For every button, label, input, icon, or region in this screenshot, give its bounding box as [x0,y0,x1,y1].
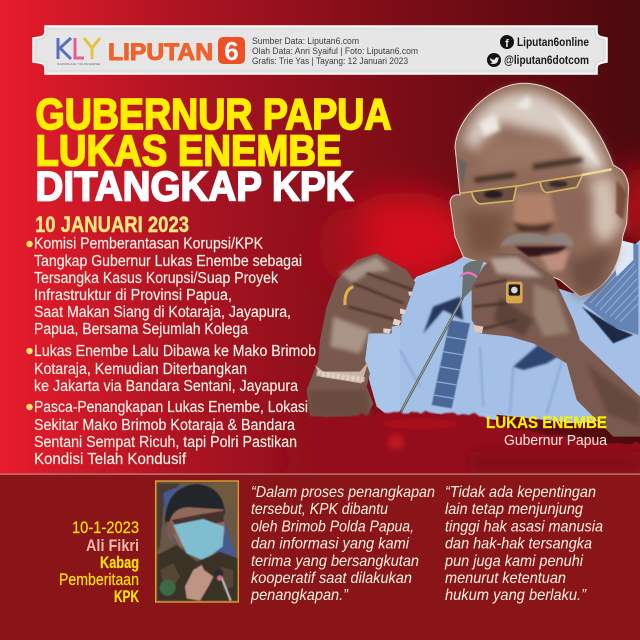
quote 1: oleh Brimob Polda Papua, [251,518,414,536]
quote 1: “Dalam proses penangkapan [251,484,435,501]
ragged red fade below portrait [270,412,640,480]
quote 2: lain tetap menjunjung [445,501,583,518]
Liputan6 logo: LIPUTAN [108,39,213,66]
bullet 2: Kotaraja, Kemudian Diterbangkan [34,361,247,378]
portrait name label: Gubernur Papua [504,432,608,449]
social: facebook [500,35,589,50]
microphone [400,261,483,413]
bullet 3: Sekitar Mako Brimob Kotaraja & Bandara [34,417,295,434]
shirt and left fist [307,253,497,420]
speaker label: Ali Fikri [86,536,139,555]
bullet 1 [26,236,302,338]
speaker label: Pemberitaan [59,570,139,589]
KLY logo [57,38,100,66]
portrait name label [486,413,608,449]
bullet 1: Tersangka Kasus Korupsi/Suap Proyek [34,270,278,287]
Liputan6 logo [108,36,245,66]
title: GUBERNUR PAPUA [36,91,392,139]
speaker label: Kabag [100,553,139,572]
speaker label: KPK [114,587,139,606]
speaker label [59,518,139,606]
quote 1: penangkapan.” [250,587,349,604]
bullet 2: Lukas Enembe Lalu Dibawa ke Mako Brimob [34,343,316,360]
bullet 3 [26,399,308,468]
bullet 1: Tangkap Gubernur Lukas Enembe sebagai [34,253,302,270]
title: DITANGKAP KPK [36,162,354,210]
face shading [457,91,627,297]
title [36,91,392,210]
bullet 1: Saat Makan Siang di Kotaraja, Jayapura, [34,304,291,321]
ring [506,282,523,303]
right hand and forearm [472,253,640,437]
source credits: Olah Data: Anri Syaiful | Foto: Liputan6.com [252,46,418,57]
quote 2 [444,484,603,604]
head and shirt [400,83,640,437]
bullet 1: Komisi Pemberantasan Korupsi/KPK [34,236,264,252]
quote 2: tinggi hak asasi manusia [445,518,603,536]
source credits [252,36,418,67]
social: facebook: Liputan6online [517,37,589,49]
speaker photo [156,481,238,602]
quote 1: dan informasi yang kami [251,536,409,552]
title: LUKAS ENEMBE [36,128,342,176]
quote 2: “Tidak ada kepentingan [445,484,596,501]
bullet 2: ke Jakarta via Bandara Sentani, Jayapura [34,378,298,395]
social: twitter [487,53,589,67]
bullet 3: Pasca-Penangkapan Lukas Enembe, Lokasi [34,399,308,416]
source credits: Grafis: Trie Yas | Tayang: 12 Januari 2023 [252,56,408,67]
quote 2: hukum yang berlaku.” [445,587,587,604]
portrait: Lukas Enembe [307,83,640,437]
bullet list [26,236,316,468]
glasses [460,169,612,204]
bullet 1: Infrastruktur di Provinsi Papua, [34,287,232,304]
quote 1: terima yang bersangkutan [251,553,419,570]
quote 1 [250,484,435,604]
quote 2: pun juga kami penuhi [444,553,583,570]
date heading: 10 JANUARI 2023 [35,212,189,237]
quote 1: kooperatif saat dilakukan [251,570,412,587]
bullet 3: Sentani Sempat Ricuh, tapi Polri Pastikan [34,434,297,451]
bullet 3: Kondisi Telah Kondusif [34,451,187,468]
quote 1: tersebut, KPK dibantu [251,501,388,518]
portrait name label: LUKAS ENEMBE [486,413,607,432]
header plate [33,26,607,74]
bottom panel [0,474,640,640]
speaker label: 10-1-2023 [72,518,139,537]
Liputan6 logo: 6 [224,36,239,66]
bullet 1: Papua, Bersama Sejumlah Kolega [34,321,248,338]
source credits: Sumber Data: Liputan6.com [252,36,359,47]
bullet 2 [26,343,316,395]
quote 2: dan hak-hak tersangka [445,536,592,552]
social: twitter: @liputan6dotcom [504,55,589,67]
social: facebook: f [505,38,509,50]
quote 2: menurut ketentuan [445,570,566,587]
KLY logo: KAPANLAGI YOUNIVERSE [57,62,100,66]
